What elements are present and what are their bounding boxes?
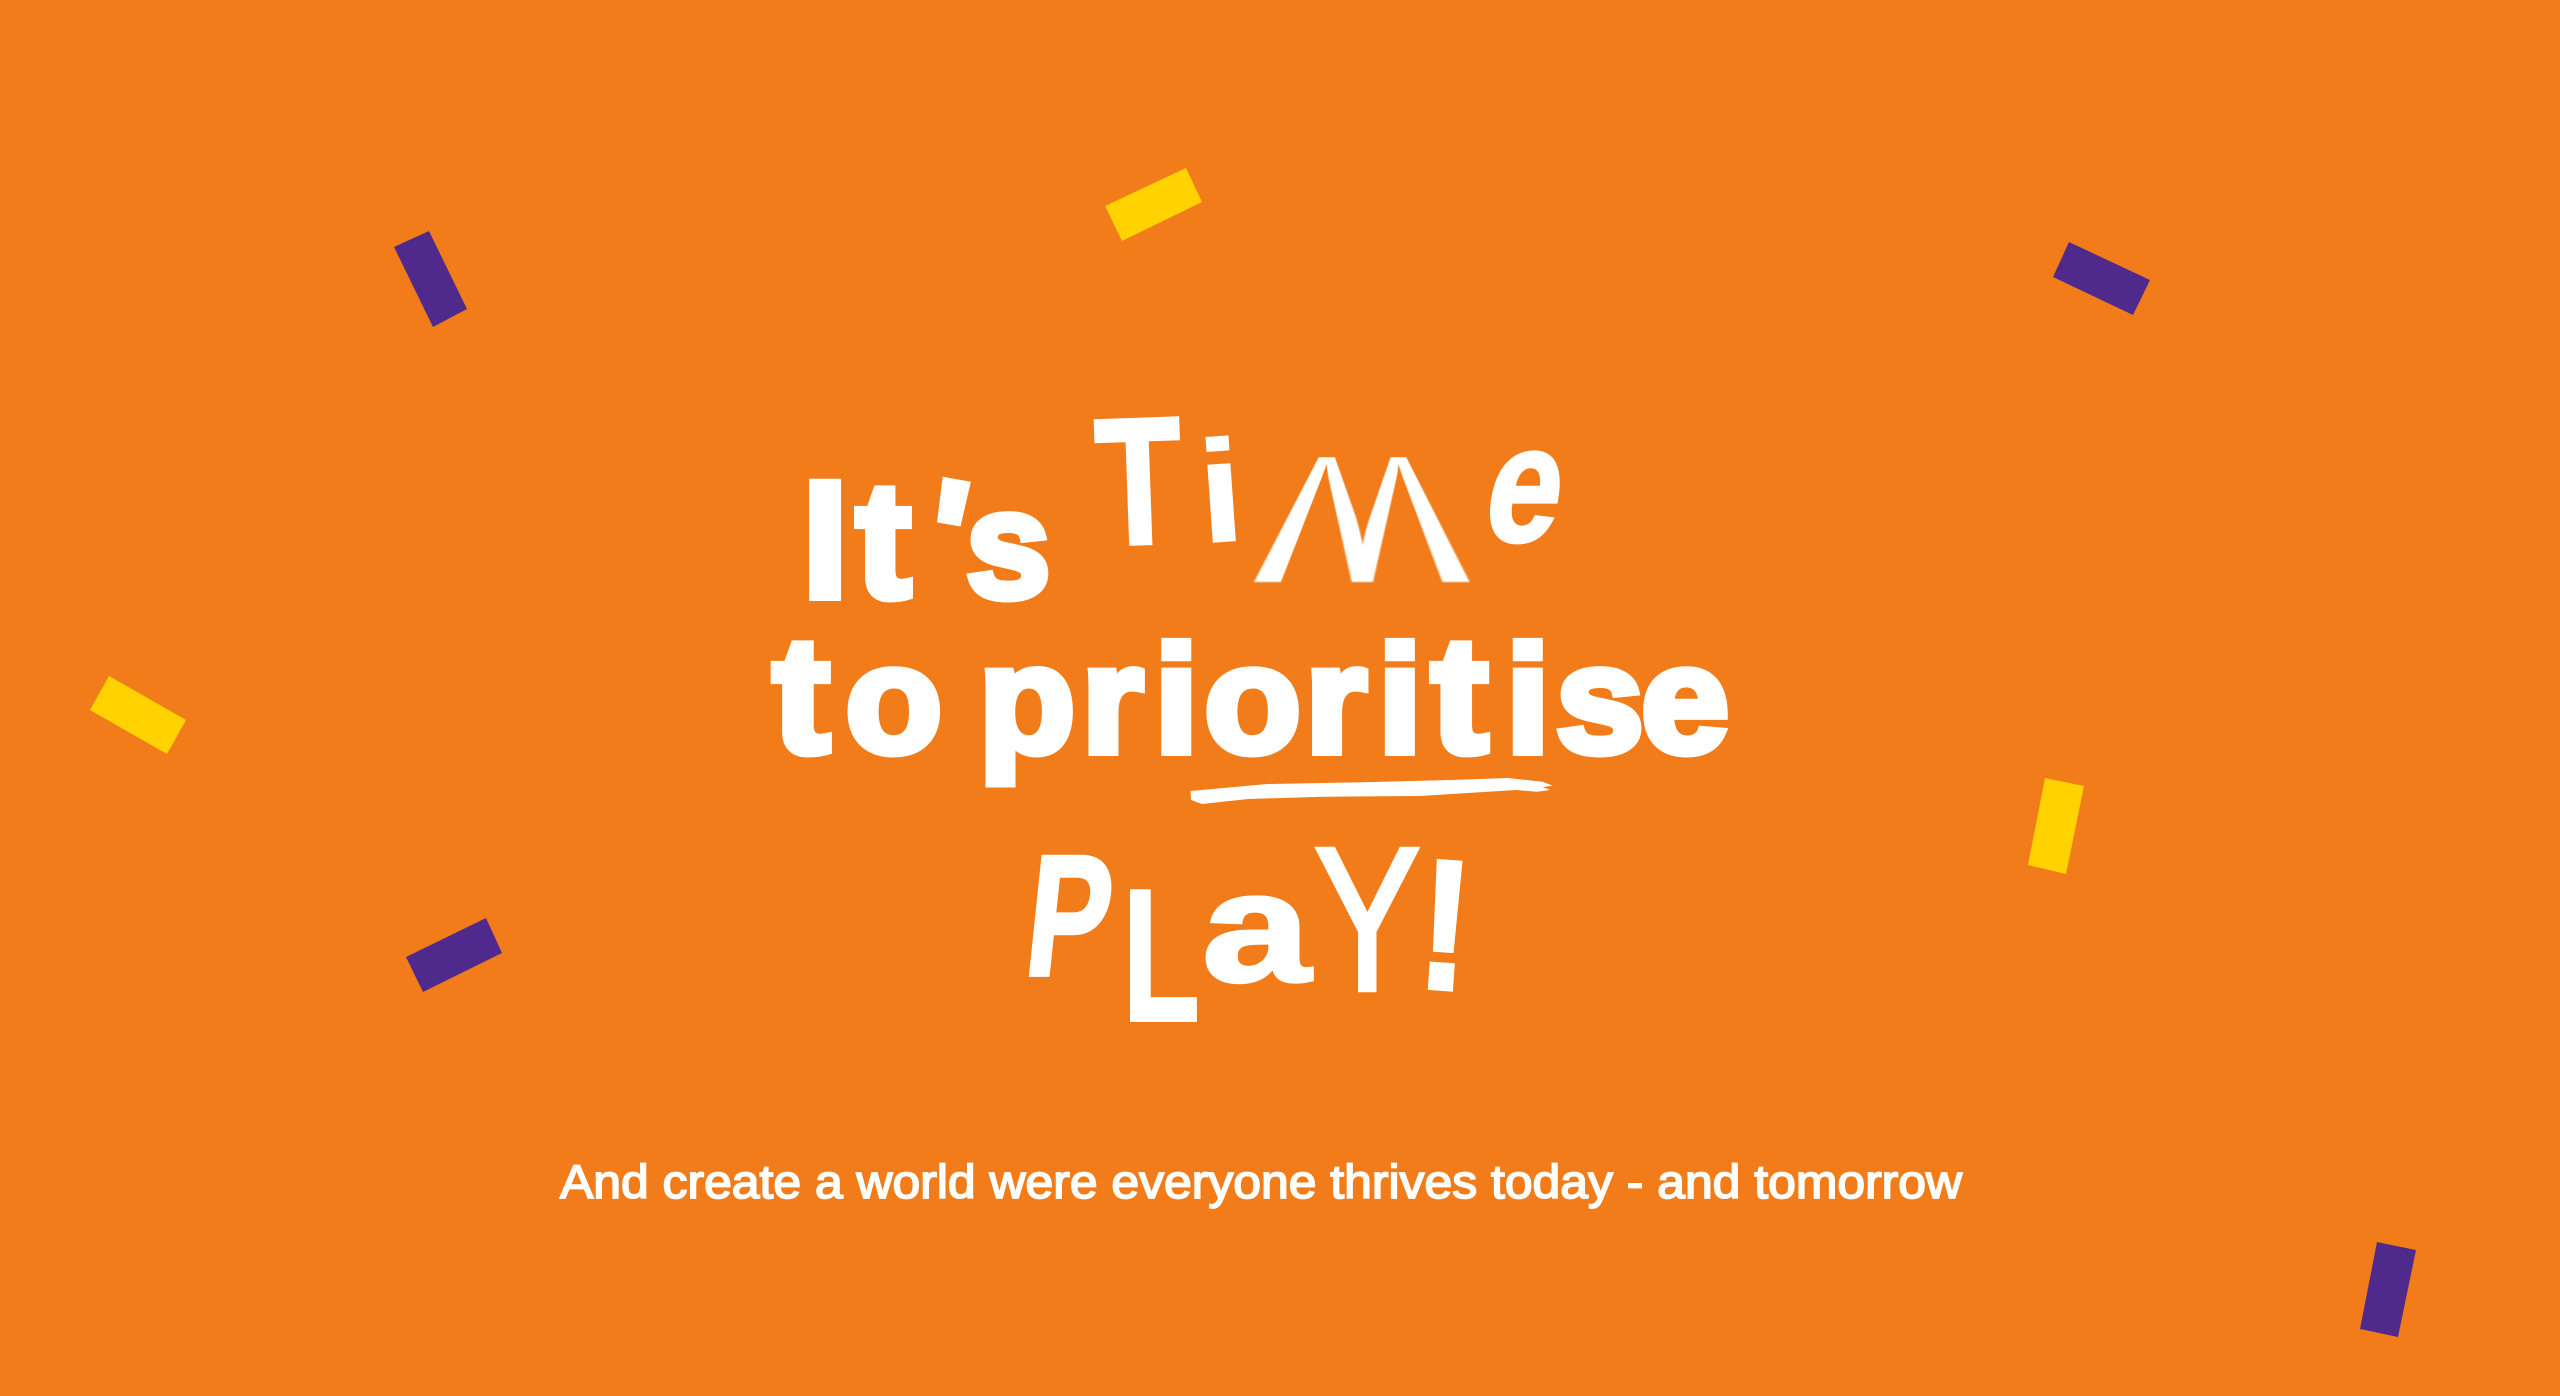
confetti: yellow left bbox=[90, 676, 186, 754]
text: M bbox=[615, 415, 2560, 1296]
hand-lettered word: PLAY!: a bbox=[1202, 841, 1312, 1015]
heading line: It's: It's bbox=[802, 448, 1051, 633]
heading line: to prioritise: to prioritise bbox=[773, 603, 1729, 787]
confetti: yellow top centre bbox=[1105, 168, 1202, 241]
confetti: purple bottom right bbox=[2360, 1242, 2416, 1337]
confetti: purple lower left bbox=[406, 918, 502, 992]
hand-lettered word: PLAY!: L bbox=[1123, 851, 1199, 1060]
confetti: purple top left bbox=[394, 231, 467, 327]
confetti: yellow right bbox=[2028, 778, 2084, 874]
brush underline bbox=[1190, 778, 1553, 804]
hand-lettered word: TIME bbox=[615, 380, 2560, 1296]
hand-lettered word: TIME: i bbox=[1192, 411, 1250, 572]
confetti: purple top right bbox=[2053, 242, 2150, 315]
subtitle: And create a world were everyone thrives today - and tomorrow bbox=[560, 1155, 1963, 1208]
hand-lettered word: PLAY!: P bbox=[1018, 819, 1122, 1011]
hand-lettered word: TIME: T bbox=[1092, 380, 1185, 584]
hand-lettered word: PLAY! bbox=[1018, 805, 1478, 1060]
hand-lettered word: PLAY!: Y bbox=[1314, 805, 1421, 1033]
hand-lettered word: TIME: e bbox=[1474, 393, 1580, 577]
hand-lettered word: PLAY!: ! bbox=[1412, 822, 1478, 1031]
